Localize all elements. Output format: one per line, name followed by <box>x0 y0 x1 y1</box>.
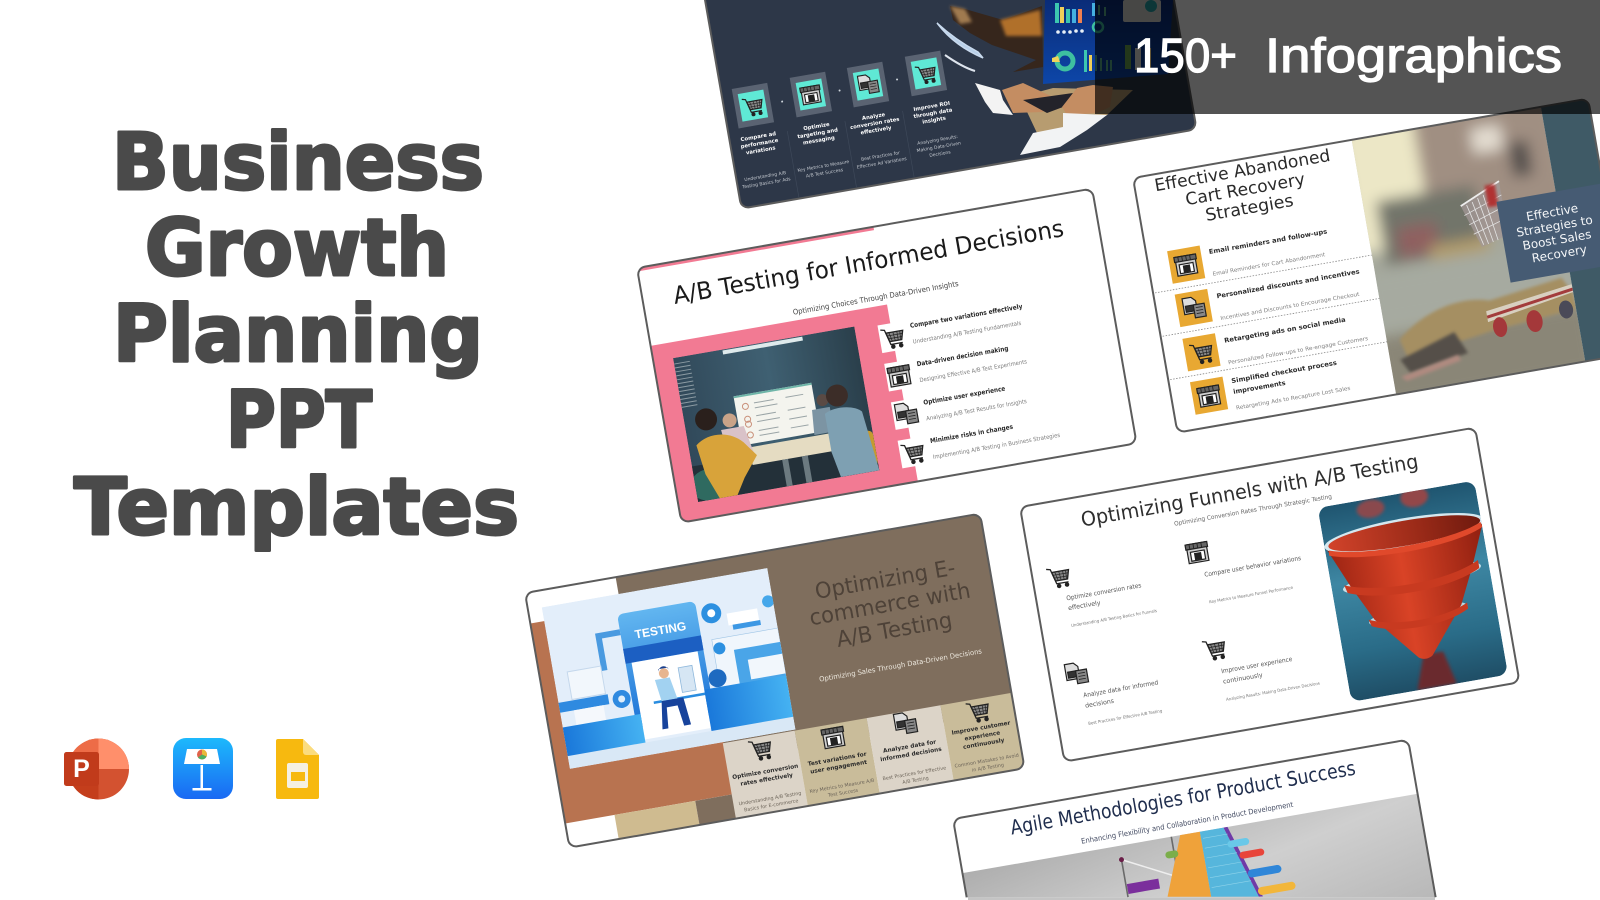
column sublabels: Testing Basics for Ads <box>741 176 792 191</box>
tile labels <box>731 721 1014 791</box>
item: data <box>1064 649 1164 728</box>
tile sublabels: in A/B Testing <box>971 762 1004 774</box>
column sublabels: Decisions <box>929 149 952 159</box>
column labels: conversion rates <box>850 117 900 131</box>
list labels: Minimize risks in changes <box>929 423 1014 445</box>
tile labels: rates effectively <box>740 773 794 788</box>
list sublabels <box>912 318 1061 461</box>
column labels: through data <box>913 107 953 120</box>
panel: e-commerce slide <box>525 513 1027 849</box>
item sublabels: Personalized Follow-ups to Re-engage Customers <box>1228 336 1369 366</box>
item: experience <box>1202 623 1320 704</box>
item sublabels: Incentives and Discounts to Encourage Checkout <box>1220 292 1361 322</box>
banner <box>1095 0 1600 114</box>
icon: cart 2 <box>915 64 937 85</box>
subheading: Optimizing Sales Through Data-Driven Decisions <box>819 647 983 684</box>
tile sublabels: Key Metrics to Measure A/B <box>809 778 875 795</box>
item: conversion: effectively <box>1068 600 1101 612</box>
icon: Keynote <box>173 738 233 799</box>
icon: PowerPoint: P <box>73 755 90 783</box>
item labels: Personalized discounts and incentives <box>1216 267 1360 300</box>
icons <box>880 330 904 349</box>
column labels: insights <box>922 116 946 126</box>
column labels: performance <box>740 138 779 150</box>
heading: Effective Abandoned <box>1153 146 1332 196</box>
heading: A/B Testing for Informed Decisions <box>671 214 1066 310</box>
title: PPT <box>226 376 372 466</box>
column labels: effectively <box>860 125 893 136</box>
item labels: improvements <box>1233 379 1286 396</box>
title: Business <box>112 118 484 208</box>
item: experience: Improve user experience <box>1221 656 1293 675</box>
panel: dark slide <box>697 0 1197 209</box>
item icons <box>1167 246 1228 415</box>
subheading: Enhancing Flexibility and Collaboration in Product Development <box>1080 800 1294 846</box>
column labels: Analyze <box>862 112 886 122</box>
banner: 150+ <box>1134 30 1237 83</box>
item: experience: continuously <box>1223 672 1264 686</box>
item labels <box>1208 223 1377 396</box>
icon: PowerPoint <box>64 738 129 800</box>
list sublabels: Implementing A/B Testing in Business Strategies <box>933 433 1061 461</box>
heading: Optimizing E- <box>813 556 957 605</box>
title: Growth <box>145 204 449 294</box>
column labels: Compare ad <box>740 131 777 143</box>
item: conversion <box>1046 552 1157 631</box>
subheading: Optimizing Choices Through Data-Driven Insights <box>792 279 959 317</box>
column labels <box>739 101 954 157</box>
column labels: targeting and <box>797 127 839 140</box>
dividers <box>1155 255 1387 380</box>
list sublabels: Designing Effective A/B Test Experiments <box>919 359 1028 384</box>
heading <box>803 554 977 657</box>
column sublabels: Making Data-Driven <box>916 140 962 154</box>
item: conversion: Optimize conversion rates <box>1066 582 1142 602</box>
tile sublabels: Test Success <box>827 788 859 799</box>
list labels: Data-driven decision making <box>916 344 1009 368</box>
icon: document <box>857 73 879 95</box>
tile sublabels <box>738 753 1021 814</box>
column labels: Improve ROI <box>913 101 951 113</box>
icon: shop <box>800 85 822 105</box>
column sublabels: A/B Test Success <box>806 167 844 180</box>
panel: agile slide <box>953 740 1436 900</box>
list labels: Compare two variations effectively <box>909 302 1024 330</box>
heading: Strategies <box>1204 191 1295 226</box>
image: testing illustration: TESTING <box>634 619 687 642</box>
image: testing illustration <box>542 568 796 769</box>
tile labels: Optimize conversion <box>732 764 799 781</box>
item: experience: Analyzing Results: Making Data-Driven Decisions <box>1226 681 1320 702</box>
callout box: Strategies to <box>1515 213 1594 240</box>
title: Templates <box>74 463 519 553</box>
column sublabels: Best Practices for <box>861 150 901 163</box>
item: behavior: Compare user behavior variations <box>1204 555 1302 579</box>
item sublabels: Retargeting Ads to Recapture Lost Sales <box>1236 386 1351 412</box>
photo: abandoned cart <box>1352 108 1585 394</box>
title: Planning <box>113 290 483 380</box>
item: behavior: Key Metrics to Measure Funnel Performance <box>1209 585 1294 604</box>
heading: Cart Recovery <box>1184 170 1307 210</box>
tile labels: experience <box>964 730 1001 743</box>
column labels: Optimize <box>803 122 831 132</box>
column sublabels: Effective Ad Variations <box>856 156 908 171</box>
tile sublabels: Understanding A/B Testing <box>738 791 802 807</box>
heading <box>1153 146 1338 234</box>
item sublabels: Email Reminders for Cart Abandonment <box>1212 252 1326 278</box>
banner: Infographics <box>1265 30 1562 83</box>
column sublabels: Understanding A/B <box>744 170 787 183</box>
tile sublabels: Common Mistakes to Avoid <box>954 753 1019 770</box>
item sublabels <box>1212 247 1377 412</box>
item: data: decisions <box>1085 698 1115 710</box>
item: data: Analyze data for informed <box>1083 679 1159 699</box>
photo: red funnel <box>1317 476 1511 702</box>
panel: A/B testing slide <box>637 189 1137 523</box>
callout box: Recovery <box>1531 242 1588 265</box>
tile labels: continuously <box>963 738 1005 751</box>
photo: laptop and hands <box>937 0 1173 155</box>
heading: A/B Testing <box>835 608 954 653</box>
tile labels: Improve customer <box>951 721 1011 737</box>
heading: Optimizing Funnels with A/B Testing <box>1079 449 1420 532</box>
item: data: Best Practices for Effective A/B Testing <box>1088 708 1163 726</box>
subheading: Optimizing Conversion Rates Through Strategic Testing <box>1174 493 1333 528</box>
item labels: Retargeting ads on social media <box>1224 316 1346 345</box>
icon: Google Slides <box>276 739 319 799</box>
image: agile chart <box>962 794 1436 900</box>
panel: funnel slide <box>1020 428 1520 762</box>
tile labels: informed decisions <box>880 747 943 763</box>
tile labels: Test variations for <box>807 752 867 768</box>
panel: cart recovery slide <box>1130 79 1600 444</box>
column sublabels <box>739 134 963 192</box>
list sublabels: Understanding A/B Testing Fundamentals <box>912 321 1022 346</box>
tile sublabels: Best Practices for Effective <box>882 765 947 782</box>
title <box>74 118 519 553</box>
column sublabels: Analyzing Results: <box>917 134 958 147</box>
tile labels: Analyze data for <box>883 740 937 755</box>
photo: meeting room <box>668 327 880 504</box>
column labels: messaging <box>803 135 835 147</box>
item: behavior <box>1185 526 1306 607</box>
heading: commerce with <box>808 579 972 631</box>
list labels: Optimize user experience <box>923 384 1006 407</box>
tile icons <box>748 741 772 761</box>
callout box <box>1497 183 1600 283</box>
list sublabels: Analyzing A/B Test Results for Insights <box>926 399 1027 422</box>
callout box: Effective <box>1525 201 1579 224</box>
item labels: Simplified checkout process <box>1231 359 1338 385</box>
heading: Agile Methodologies for Product Success <box>1008 756 1357 840</box>
list labels <box>909 302 1044 445</box>
tile sublabels: Basics for E-commerce <box>744 798 799 814</box>
icon: cart <box>742 96 764 117</box>
column labels: variations <box>746 145 776 156</box>
item: conversion: Understanding A/B Testing Basics for Funnels <box>1071 608 1157 628</box>
column sublabels: Key Metrics to Measure <box>797 159 850 174</box>
callout box: Boost Sales <box>1521 227 1592 253</box>
tile sublabels: A/B Testing <box>902 775 929 786</box>
item labels: Email reminders and follow-ups <box>1208 227 1328 256</box>
tile labels: user engagement <box>810 760 868 776</box>
